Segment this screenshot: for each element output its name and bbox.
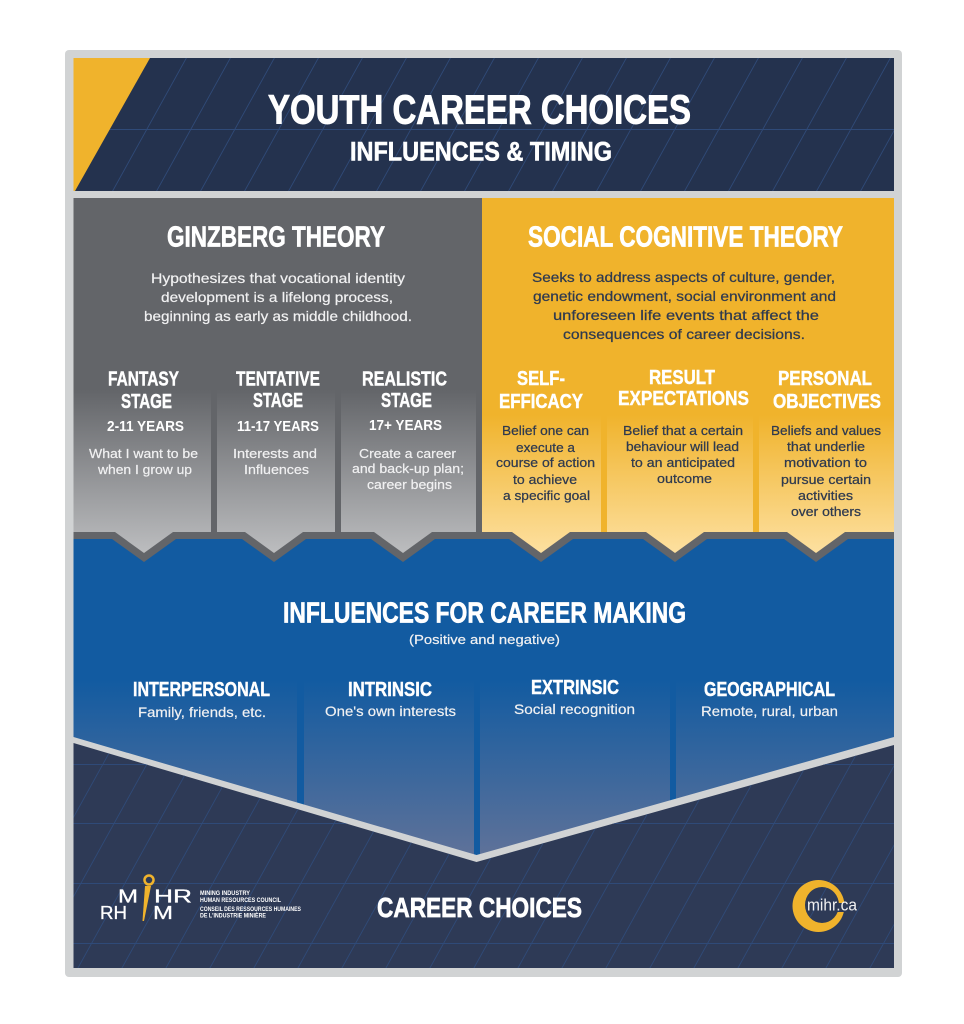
text: self-efficacy: to achieve xyxy=(513,472,577,487)
text: self-efficacy: SELF- xyxy=(517,368,565,390)
text: result expectations: outcome xyxy=(657,471,712,486)
influence: intrinsic: One's own interests xyxy=(325,703,456,719)
career choices label: CAREER CHOICES xyxy=(377,892,582,923)
logo organisation names: DE L'INDUSTRIE MINIÈRE xyxy=(200,912,266,920)
text: personal objectives xyxy=(771,368,882,519)
text: result expectations xyxy=(618,367,749,486)
dark footer area xyxy=(74,740,894,968)
text: realistic stage: 17+ YEARS xyxy=(369,418,442,434)
influence: intrinsic: INTRINSIC xyxy=(348,679,432,701)
logo: MiHR RHiM xyxy=(100,876,301,923)
influences heading: INFLUENCES FOR CAREER MAKING xyxy=(283,598,686,630)
influence: interpersonal: Family, friends, etc. xyxy=(138,704,266,720)
influence: intrinsic xyxy=(325,679,456,719)
outer frame xyxy=(65,50,902,977)
text: personal objectives: Beliefs and values xyxy=(771,423,882,438)
text: result expectations: behaviour will lead xyxy=(626,439,739,454)
logo organisation names: CONSEIL DES RESSOURCES HUMAINES xyxy=(200,907,301,913)
text: result expectations: to an anticipated xyxy=(631,455,735,470)
panel: Ginzberg theory xyxy=(74,198,894,562)
influence: extrinsic: Social recognition xyxy=(514,701,635,717)
text: self-efficacy: Belief one can xyxy=(502,423,589,438)
text: tentative stage: 11-17 YEARS xyxy=(237,419,319,435)
description: social cognitive: Seeks to address aspects of culture, gender, xyxy=(532,269,835,285)
text: realistic stage xyxy=(352,368,464,492)
text: fantasy stage: STAGE xyxy=(121,391,172,413)
text: self-efficacy: EFFICACY xyxy=(499,391,584,413)
text: personal objectives: over others xyxy=(791,504,862,519)
text: realistic stage: Create a career xyxy=(359,446,457,461)
text: fantasy stage: FANTASY xyxy=(108,368,180,390)
column: result expectations xyxy=(607,415,753,553)
influence: geographical xyxy=(701,679,838,719)
blue influences section background xyxy=(74,539,894,864)
logo organisation names xyxy=(200,891,301,920)
pointer band under panels xyxy=(74,532,894,562)
text: realistic stage: STAGE xyxy=(381,390,432,412)
header banner xyxy=(74,58,894,191)
column: realistic stage xyxy=(341,390,476,553)
text: result expectations: Belief that a certain xyxy=(623,423,743,438)
text: personal objectives: pursue certain xyxy=(781,472,871,487)
column: fantasy stage xyxy=(74,390,211,553)
text: realistic stage: career begins xyxy=(367,477,453,492)
yellow corner triangle xyxy=(74,58,150,191)
bottom chevron divider xyxy=(74,737,894,862)
logo: MiHR RHiM: M xyxy=(118,886,138,906)
text: tentative stage: Influences xyxy=(244,462,310,477)
text: tentative stage: Interests and xyxy=(233,446,317,461)
text: realistic stage: and back-up plan; xyxy=(352,461,464,476)
column: tentative stage xyxy=(217,390,335,553)
column: self-efficacy xyxy=(482,415,601,553)
text: fantasy stage xyxy=(89,368,198,477)
text: fantasy stage: 2-11 YEARS xyxy=(107,419,184,435)
subtitle: INFLUENCES & TIMING xyxy=(350,136,612,166)
description: social cognitive xyxy=(532,269,836,342)
text: self-efficacy: execute a xyxy=(516,440,576,455)
text: tentative stage xyxy=(233,368,320,477)
influence: interpersonal: INTERPERSONAL xyxy=(133,679,270,701)
logo: MiHR RHiM: M xyxy=(153,903,173,923)
icon: gold pin xyxy=(142,876,154,921)
text: self-efficacy: a specific goal xyxy=(503,488,590,503)
text: result expectations: RESULT xyxy=(649,367,715,389)
description: social cognitive: unforeseen life events that affect the xyxy=(553,307,819,323)
title: YOUTH CAREER CHOICES xyxy=(268,86,691,132)
description: social cognitive: consequences of career decisions. xyxy=(563,326,805,342)
text: result expectations: EXPECTATIONS xyxy=(618,388,749,410)
influence: geographical: Remote, rural, urban xyxy=(701,703,838,719)
text: personal objectives: activities xyxy=(798,488,854,503)
logo: mihr.ca xyxy=(792,880,858,932)
panel: social cognitive theory xyxy=(482,198,894,553)
text: personal objectives: OBJECTIVES xyxy=(773,391,881,413)
logo: MiHR RHiM: RH xyxy=(100,903,127,923)
description: Ginzberg: beginning as early as middle childhood. xyxy=(144,308,412,324)
description: Ginzberg: development is a lifelong process, xyxy=(161,289,393,305)
heading: social cognitive theory: SOCIAL COGNITIVE THEORY xyxy=(528,222,843,254)
text: personal objectives: motivation to xyxy=(784,455,867,470)
column: personal objectives xyxy=(759,415,894,553)
text: self-efficacy xyxy=(496,368,595,503)
heading: Ginzberg theory: GINZBERG THEORY xyxy=(167,222,385,254)
influence: geographical: GEOGRAPHICAL xyxy=(704,679,835,701)
description: Ginzberg xyxy=(144,270,412,324)
description: social cognitive: genetic endowment, social environment and xyxy=(533,288,836,304)
logo organisation names: MINING INDUSTRY xyxy=(200,891,250,897)
influence: interpersonal xyxy=(133,679,270,720)
text: self-efficacy: course of action xyxy=(496,455,595,470)
text: personal objectives: that underlie xyxy=(787,439,865,454)
influence: extrinsic: EXTRINSIC xyxy=(531,677,619,699)
influence: extrinsic xyxy=(514,677,635,717)
text: personal objectives: PERSONAL xyxy=(778,368,872,390)
text: fantasy stage: What I want to be xyxy=(89,446,198,461)
description: Ginzberg: Hypothesizes that vocational identity xyxy=(151,270,405,286)
text: realistic stage: REALISTIC xyxy=(362,368,447,390)
logo: MiHR RHiM: HR xyxy=(154,886,192,906)
influences subheading: (Positive and negative) xyxy=(409,632,560,647)
text: tentative stage: TENTATIVE xyxy=(236,368,320,390)
logo: mihr.ca: mihr.ca xyxy=(807,896,858,914)
text: tentative stage: STAGE xyxy=(253,390,303,412)
logo organisation names: HUMAN RESOURCES COUNCIL xyxy=(200,898,281,904)
text: fantasy stage: when I grow up xyxy=(97,462,192,477)
